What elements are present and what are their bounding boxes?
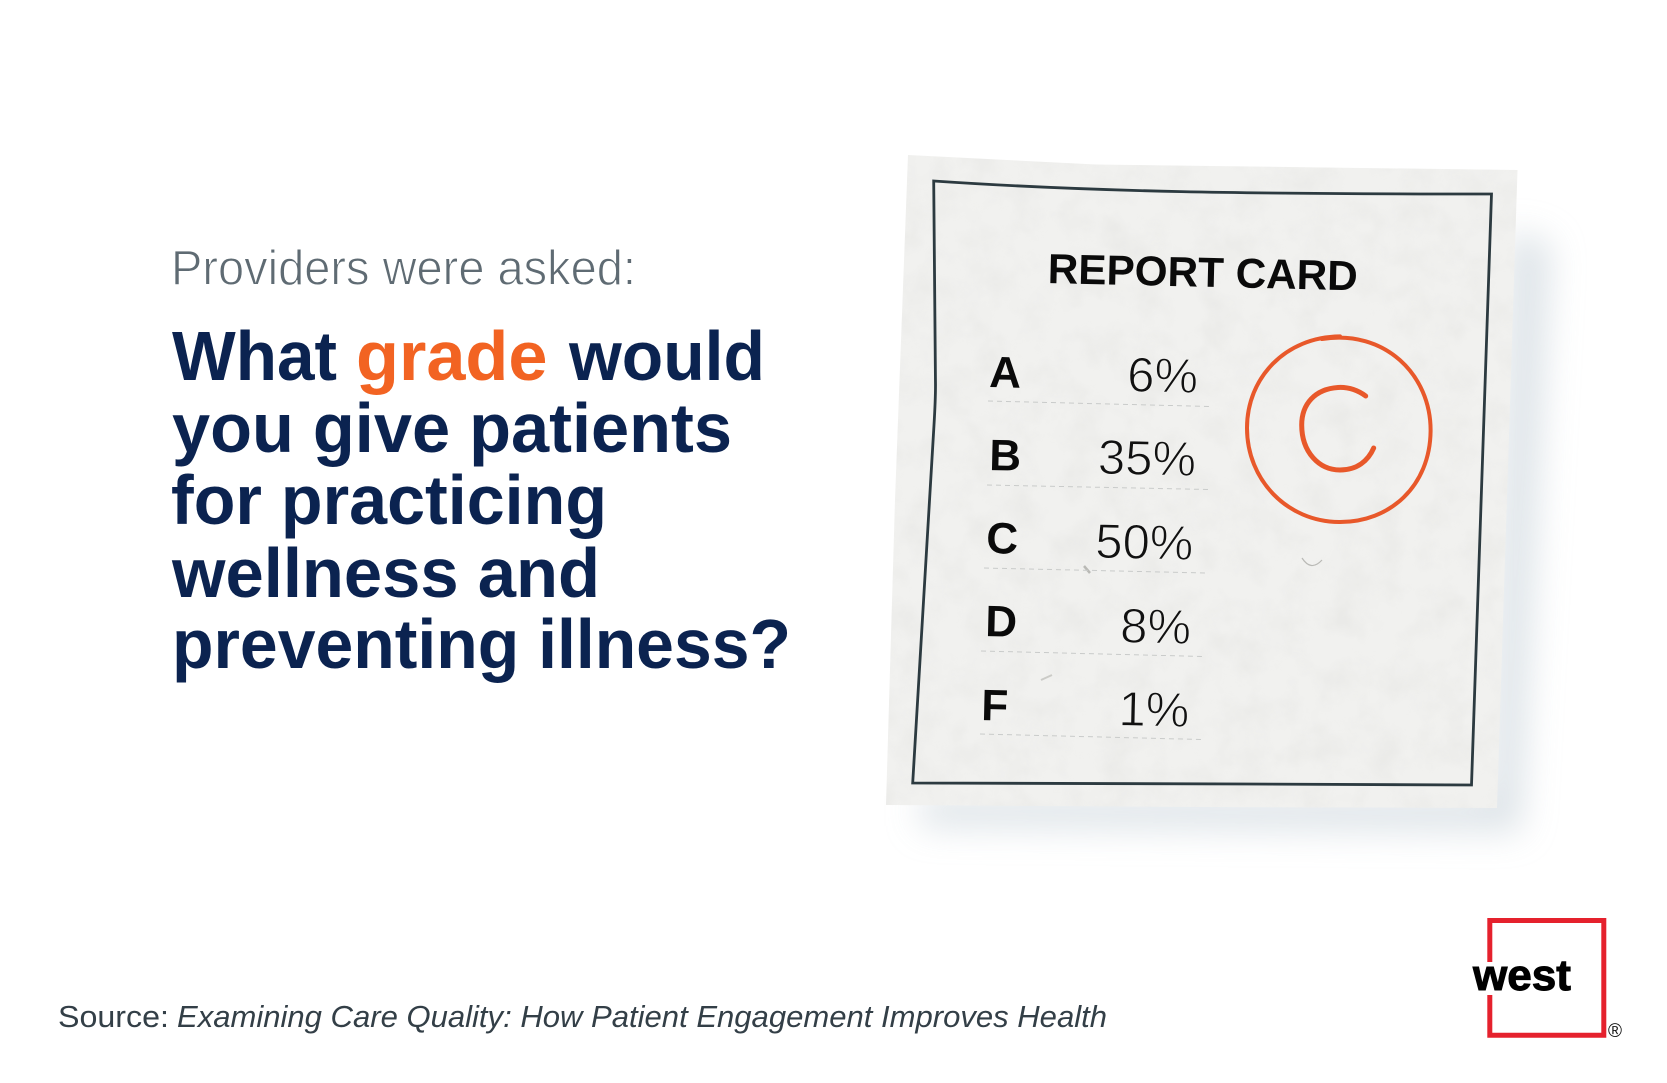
paper sheet	[886, 155, 1518, 808]
row A: A	[989, 348, 1022, 398]
report card	[886, 155, 1551, 832]
paper specks	[1041, 558, 1322, 680]
main question heading: for practicing	[171, 461, 607, 539]
west logo	[1472, 920, 1622, 1042]
row D: D	[985, 597, 1018, 647]
highlighted word: grade: grade	[356, 317, 548, 395]
main question heading: What	[172, 317, 337, 395]
row C: 50%	[1095, 515, 1194, 571]
intro line: Providers were asked:	[171, 242, 636, 296]
main question heading: wellness and	[171, 534, 600, 612]
main question heading	[171, 317, 791, 683]
row B: 35%	[1097, 431, 1197, 487]
row D: 8%	[1120, 599, 1192, 655]
main question heading: would	[568, 317, 765, 395]
registered mark: ®	[1608, 1021, 1622, 1042]
paper shadow	[920, 230, 1551, 832]
card border	[913, 181, 1492, 785]
logo wordmark: west	[1472, 951, 1571, 1000]
row F: 1%	[1118, 682, 1190, 738]
row B	[987, 431, 1209, 490]
row C	[984, 514, 1206, 573]
row F	[980, 681, 1202, 740]
logo square	[1490, 920, 1604, 1035]
grade rows	[980, 348, 1211, 740]
source citation: Source:	[58, 999, 169, 1034]
source citation: Examining Care Quality: How Patient Engagement Improves Health	[177, 999, 1107, 1034]
main question heading: preventing illness?	[172, 605, 791, 683]
row B: B	[989, 431, 1022, 481]
card title: REPORT CARD	[1047, 245, 1358, 299]
row F: F	[981, 681, 1009, 731]
circled grade C	[1247, 336, 1431, 522]
row D	[981, 597, 1204, 656]
row A	[988, 348, 1211, 406]
row C: C	[986, 514, 1019, 564]
row A: 6%	[1127, 348, 1199, 404]
main question heading: you give patients	[172, 389, 732, 467]
